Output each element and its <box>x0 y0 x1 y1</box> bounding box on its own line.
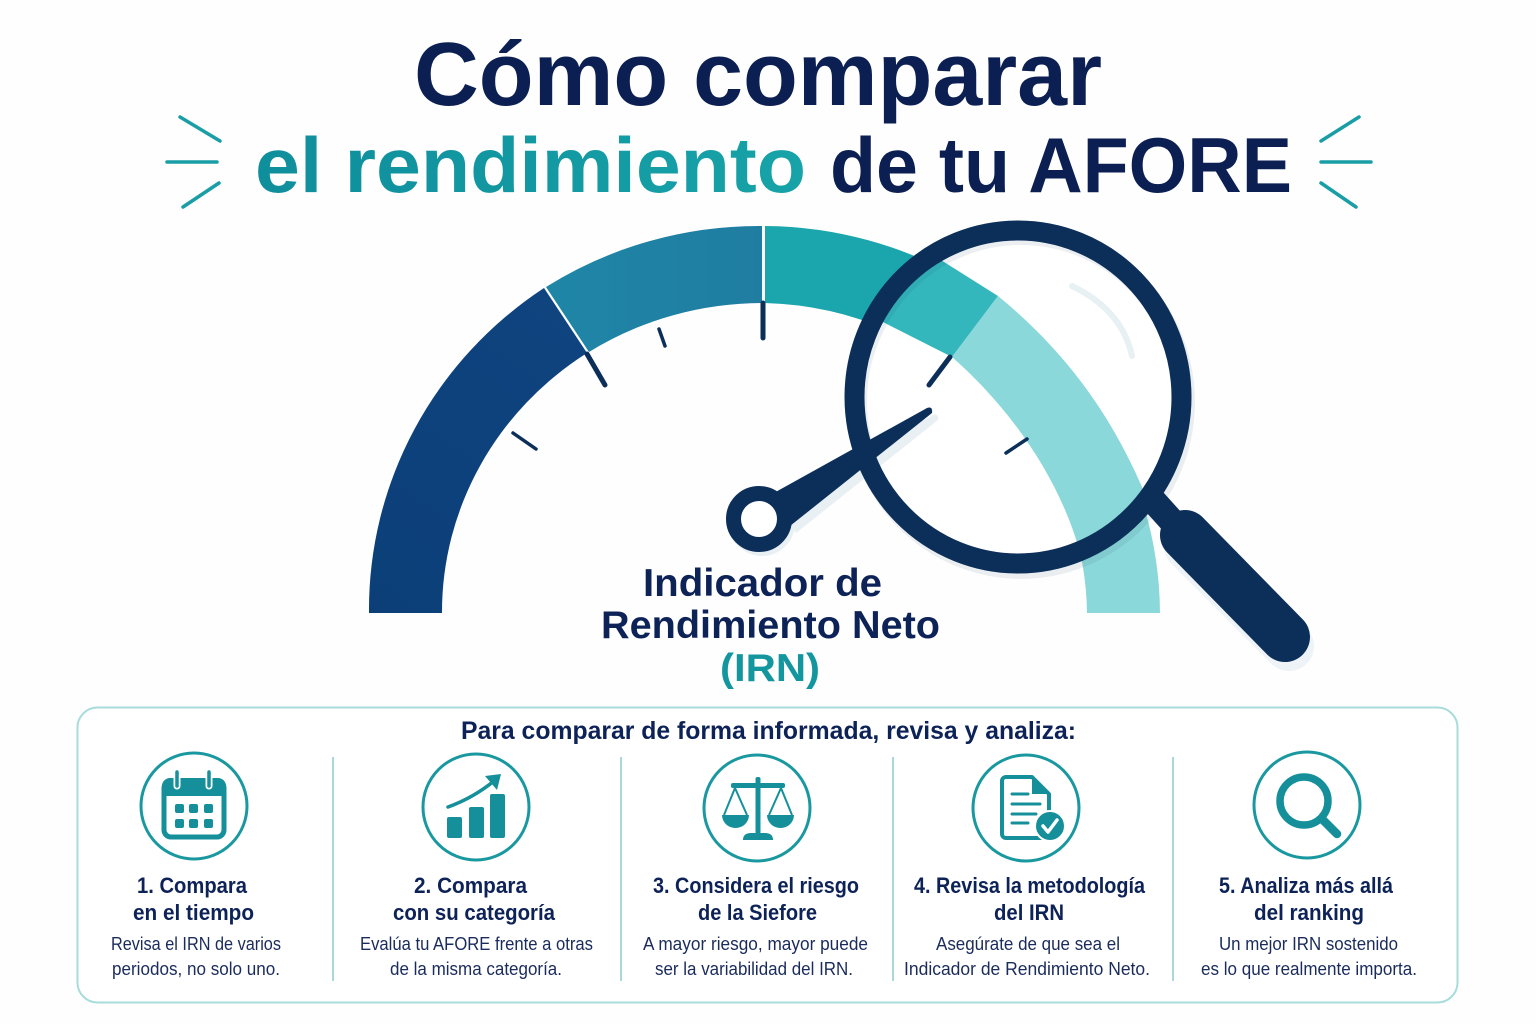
magnifying glass <box>854 230 1289 646</box>
step 4 heading: del IRN <box>994 900 1064 925</box>
step 3 heading <box>653 873 859 925</box>
gauge tick marks <box>513 303 763 449</box>
icon: document with check <box>973 755 1079 861</box>
panel: comparison steps <box>78 708 1458 1002</box>
needle shadow <box>729 415 938 556</box>
step 5 heading: del ranking <box>1254 900 1364 925</box>
magnifier handle <box>1185 535 1285 637</box>
gauge chart <box>369 226 1160 613</box>
step 5: beyond the ranking <box>1201 752 1417 979</box>
step 5 heading: 5. Analiza más allá <box>1219 873 1394 898</box>
step 3 description: A mayor riesgo, mayor puede <box>643 934 868 954</box>
title <box>255 25 1292 209</box>
step 2 description: de la misma categoría. <box>390 959 562 979</box>
step 2: compare with category <box>360 754 593 979</box>
panel heading: Para comparar de forma informada, revisa y analiza: <box>461 717 1076 745</box>
magnified tick marks <box>929 357 950 385</box>
step 4 description: Indicador de Rendimiento Neto. <box>904 959 1150 979</box>
lens highlight <box>1072 286 1132 356</box>
magnified teal segment <box>883 260 998 356</box>
gauge segment: light teal end <box>1071 500 1160 613</box>
icon: balance scale <box>704 755 810 861</box>
title: Cómo comparar <box>414 25 1102 125</box>
gauge segment: mid blue <box>546 226 762 352</box>
step 2 heading: 2. Compara <box>414 873 528 898</box>
step 3: consider risk <box>643 755 868 979</box>
step 1 description: periodos, no solo uno. <box>112 959 280 979</box>
step 4 heading <box>914 873 1146 925</box>
icon: calendar <box>141 753 247 859</box>
icon: magnifying glass <box>1254 752 1360 858</box>
step 5 description: Un mejor IRN sostenido <box>1219 934 1398 954</box>
step 2 heading: con su categoría <box>393 900 556 925</box>
step 3 heading: 3. Considera el riesgo <box>653 873 859 898</box>
step 1 heading: 1. Compara <box>137 873 248 898</box>
gauge needle <box>729 408 938 556</box>
step 3 description: ser la variabilidad del IRN. <box>655 959 853 979</box>
step 1 heading <box>133 873 254 925</box>
magnifier ring <box>854 230 1182 564</box>
step 5 description: es lo que realmente importa. <box>1201 959 1417 979</box>
step 2 heading <box>393 873 556 925</box>
icon: rising bar chart <box>423 754 529 860</box>
step 4 heading: 4. Revisa la metodología <box>914 873 1146 898</box>
step 1 heading: en el tiempo <box>133 900 254 925</box>
gauge segment: dark blue <box>369 288 587 613</box>
step 1 description: Revisa el IRN de varios <box>111 934 281 954</box>
magnifier lens contents <box>880 260 1142 542</box>
gauge label: (IRN) <box>720 647 820 690</box>
step 3 heading: de la Siefore <box>698 900 817 925</box>
gauge label: Indicador de <box>643 562 882 605</box>
ring shadow <box>857 235 1185 569</box>
step 4: review methodology <box>904 755 1150 979</box>
icon: left accent rays <box>167 117 220 207</box>
gauge label: Rendimiento Neto <box>601 604 940 647</box>
step 4 description <box>904 934 1150 979</box>
step 2 description: Evalúa tu AFORE frente a otras <box>360 934 593 954</box>
gauge segment: teal <box>765 226 965 338</box>
step 1: compare over time <box>111 753 281 979</box>
step 3 description <box>643 934 868 979</box>
magnifier neck <box>1150 497 1178 528</box>
step 4 description: Asegúrate de que sea el <box>936 934 1120 954</box>
icon: right accent rays <box>1321 117 1371 207</box>
title: de tu AFORE <box>830 121 1292 209</box>
step 5 heading <box>1219 873 1394 925</box>
needle pivot ring <box>734 494 784 544</box>
gauge label <box>601 562 940 690</box>
handle shadow <box>1189 546 1289 646</box>
step 2 description <box>360 934 593 979</box>
needle pointer <box>772 408 932 526</box>
title: el rendimiento <box>255 121 806 209</box>
step 5 description <box>1201 934 1417 979</box>
magnified light teal segment <box>952 296 1142 542</box>
step 1 description <box>111 934 281 979</box>
